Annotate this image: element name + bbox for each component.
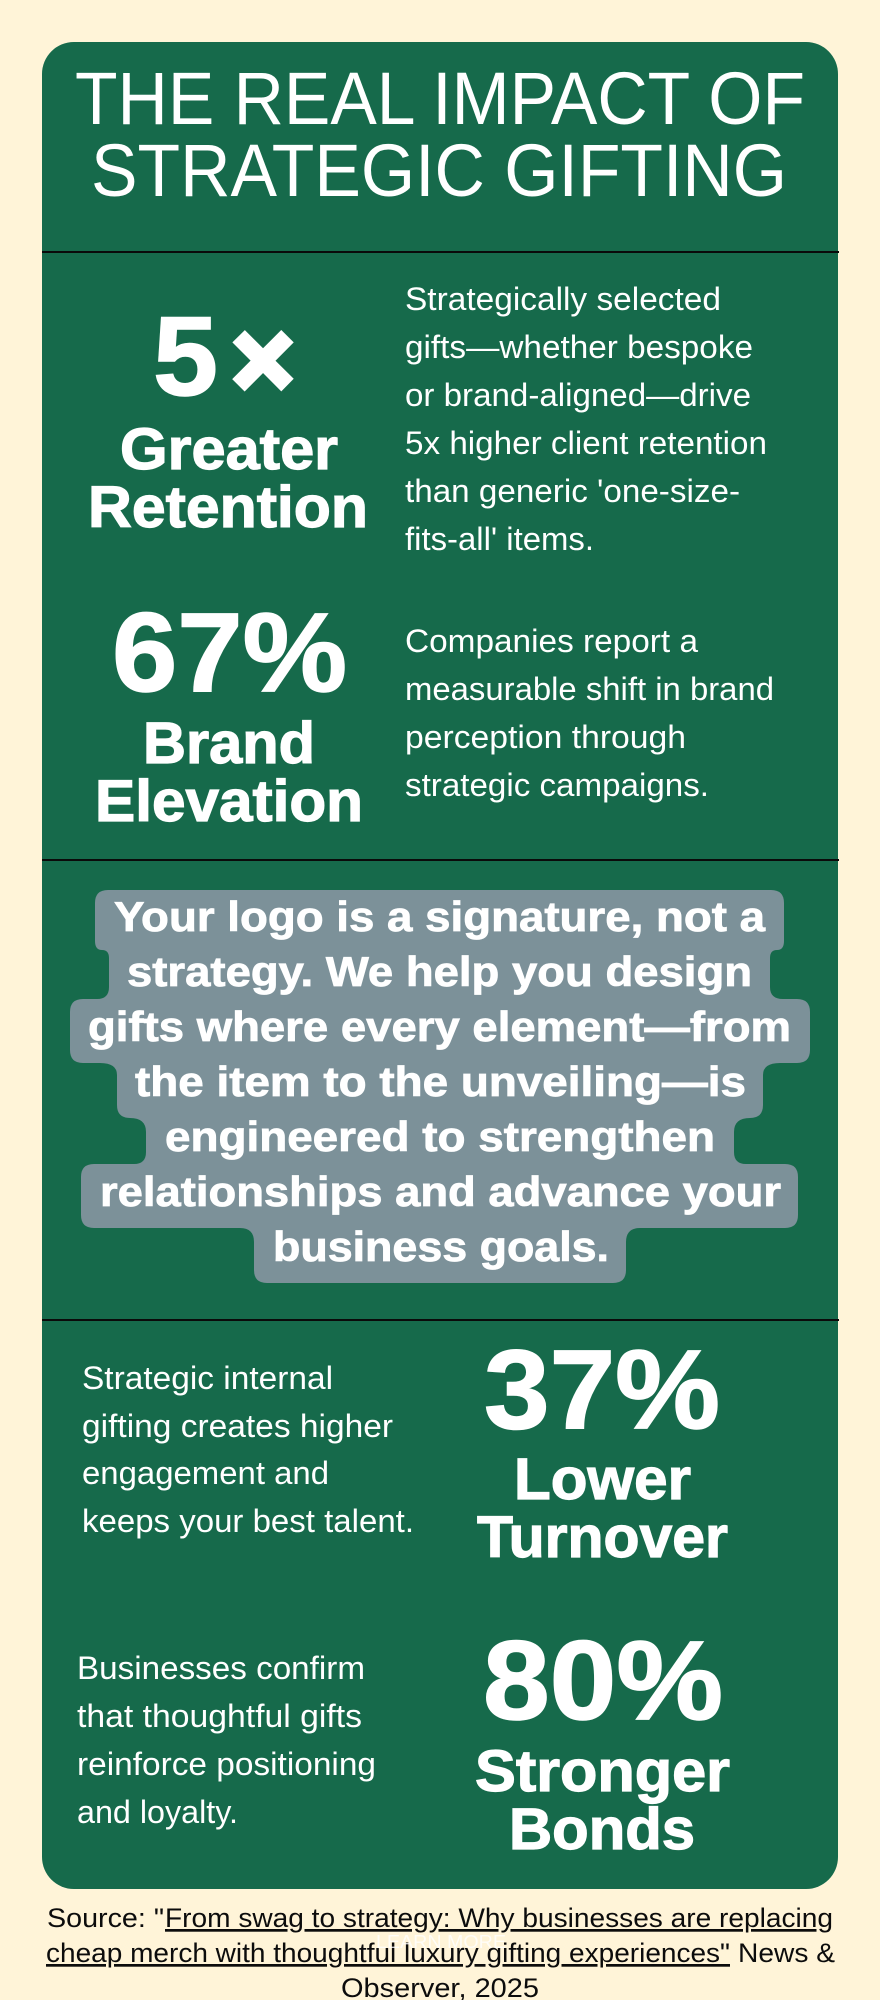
big number 67%: 67% (112, 590, 347, 715)
label: lower turnover: Turnover (477, 1505, 728, 1570)
label: brand elevation (95, 711, 363, 834)
text: brand elevation description: Companies report a (405, 623, 698, 659)
text: retention description (405, 281, 767, 557)
title: THE REAL IMPACT OF (75, 57, 805, 140)
label: greater retention: Retention (88, 475, 368, 540)
text: retention description: than generic 'one-size- (405, 473, 740, 509)
text: retention description: fits-all' items. (405, 521, 594, 557)
text: turnover description: keeps your best talent. (82, 1503, 414, 1539)
source citation: Source: " (47, 1903, 164, 1933)
text: stronger bonds description: that thoughtful gifts (77, 1698, 362, 1734)
text: brand elevation description (405, 623, 774, 803)
text: stronger bonds description: reinforce positioning (77, 1746, 376, 1782)
big number 80%: 80% (483, 1618, 723, 1743)
label: brand elevation: Elevation (95, 769, 363, 834)
label: greater retention: Greater (120, 417, 338, 482)
label: stronger bonds: Stronger (475, 1739, 730, 1804)
big number 37%: 37% (484, 1327, 720, 1452)
text: retention description: or brand-aligned—drive (405, 377, 751, 413)
text: turnover description: engagement and (82, 1455, 329, 1491)
callout: highlighted statement: Your logo is a signature, not a (114, 893, 766, 940)
callout: highlighted statement: strategy. We help you design (127, 948, 752, 995)
callout: highlighted statement (70, 890, 810, 1283)
callout: highlighted statement: relationships and advance your (100, 1168, 781, 1215)
text: brand elevation description: perception through (405, 719, 686, 755)
text: turnover description (82, 1360, 414, 1539)
text: stronger bonds description (77, 1650, 376, 1830)
text: retention description: Strategically selected (405, 281, 721, 317)
source citation: cheap merch with thoughtful luxury gifting experiences" (46, 1938, 730, 1968)
callout: highlighted statement: engineered to strengthen (165, 1113, 715, 1160)
stat: 80% stronger bonds (475, 1618, 730, 1862)
text: stronger bonds description: and loyalty. (77, 1794, 238, 1830)
stat: 67% brand elevation (95, 590, 363, 834)
callout: highlighted statement: gifts where every element—from (88, 1003, 791, 1050)
big number 5x: 5 (153, 294, 218, 419)
source citation (46, 1903, 835, 2000)
callout: highlighted statement: the item to the unveiling—is (135, 1058, 746, 1105)
label: lower turnover: Lower (514, 1447, 691, 1512)
stat: 37% lower turnover (477, 1327, 728, 1570)
source citation: News & (738, 1938, 835, 1968)
text: brand elevation description: measurable shift in brand (405, 671, 774, 707)
text: stronger bonds description: Businesses confirm (77, 1650, 365, 1686)
text: retention description: gifts—whether bespoke (405, 329, 753, 365)
stat: 5x greater retention (88, 294, 368, 540)
label: brand elevation: Brand (143, 711, 315, 776)
label: stronger bonds: Bonds (509, 1797, 695, 1862)
big number 5x (153, 294, 294, 419)
source citation: From swag to strategy: Why businesses are replacing (165, 1903, 833, 1933)
text: turnover description: gifting creates higher (82, 1408, 393, 1444)
text: retention description: 5x higher client retention (405, 425, 767, 461)
label: greater retention (88, 417, 368, 540)
faint learn more label: LEARN MORE (376, 1932, 506, 1952)
callout: highlighted statement: business goals. (273, 1223, 609, 1270)
text: turnover description: Strategic internal (82, 1360, 333, 1396)
label: lower turnover (477, 1447, 728, 1570)
big number 5x: × (232, 301, 294, 419)
text: brand elevation description: strategic campaigns. (405, 767, 709, 803)
label: stronger bonds (475, 1739, 730, 1862)
title: STRATEGIC GIFTING (91, 129, 787, 212)
title (75, 57, 805, 212)
